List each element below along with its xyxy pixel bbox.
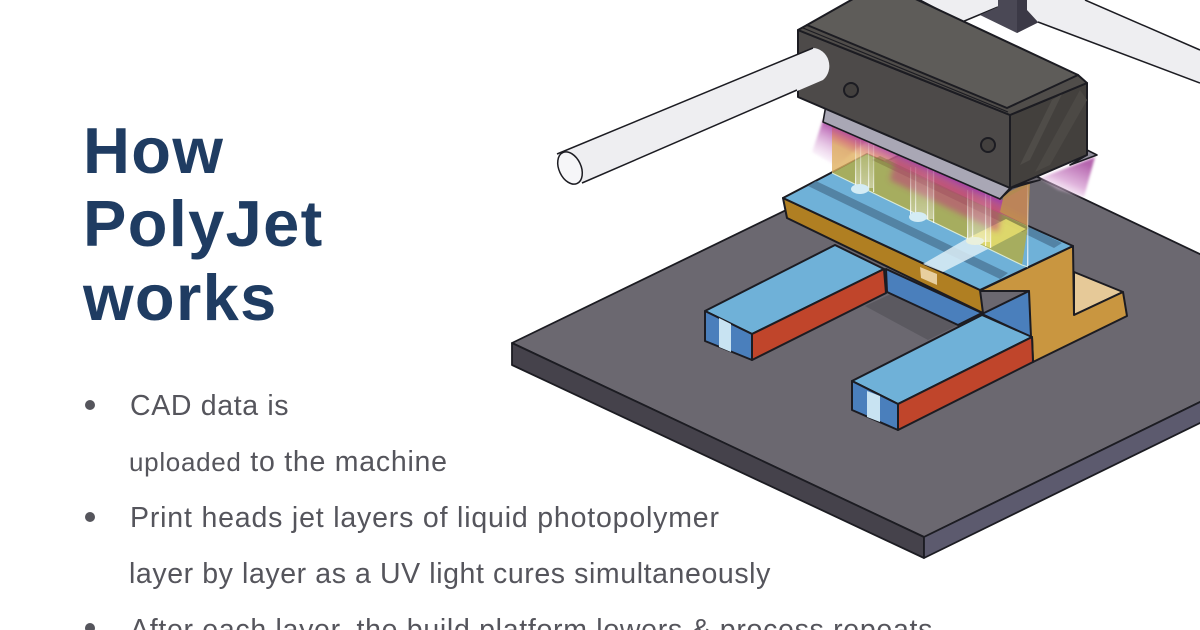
orange right curtain column (1000, 182, 1030, 226)
yellow-green curtain on slab (832, 154, 1028, 265)
head: screw right (981, 138, 995, 152)
jetting columns and droplets (851, 140, 1028, 266)
print head (798, 0, 1087, 188)
dark print passes on the slab (808, 159, 1062, 279)
title: works (83, 261, 278, 334)
part: back blue wall (886, 269, 982, 325)
part: tan mark (920, 267, 937, 285)
text: Print heads jet layers: Print heads jet layers of liquid photopolymer (130, 502, 720, 534)
part: inner blue face (982, 291, 1031, 337)
part: orange riser (979, 246, 1127, 362)
bullet 2 (85, 512, 95, 522)
print head underside plate (823, 105, 1097, 199)
UV glow left (812, 120, 868, 166)
part: right leg (852, 315, 1033, 430)
back guide rods and mount (920, 0, 1200, 83)
part: tan base top (1074, 272, 1123, 315)
curtain outline (832, 173, 1028, 267)
yellow strip in curtain (968, 219, 1026, 248)
front guide rod (553, 48, 829, 188)
text: CAD data is: CAD data is (130, 390, 289, 422)
head: front face (798, 30, 1010, 188)
UV glow right (1040, 157, 1095, 197)
title: How (83, 114, 224, 187)
build platform (512, 133, 1200, 558)
light cross strip on blue (923, 238, 990, 272)
bullet 3 (85, 623, 95, 630)
part: top slab front face (783, 198, 983, 313)
text: uploaded to the machine: uploaded to the machine (129, 446, 448, 478)
curing light above slab (832, 126, 1028, 226)
part: top slab blue surface (783, 154, 1073, 290)
head: side face (1010, 83, 1087, 188)
head: screw left (844, 83, 858, 97)
title (82, 114, 324, 334)
red-magenta band under the plate (890, 160, 1002, 232)
text: layer by layer: layer by layer as a UV light cures simultaneously (129, 558, 771, 590)
shadow under part (865, 293, 958, 340)
bullet 1 (85, 400, 95, 410)
head: lid top (807, 0, 1078, 108)
part: left leg (705, 245, 886, 360)
printed part (705, 154, 1127, 430)
dark pass through curtain (872, 156, 1030, 232)
head: lid lip (798, 25, 1087, 115)
title: PolyJet (83, 187, 324, 260)
